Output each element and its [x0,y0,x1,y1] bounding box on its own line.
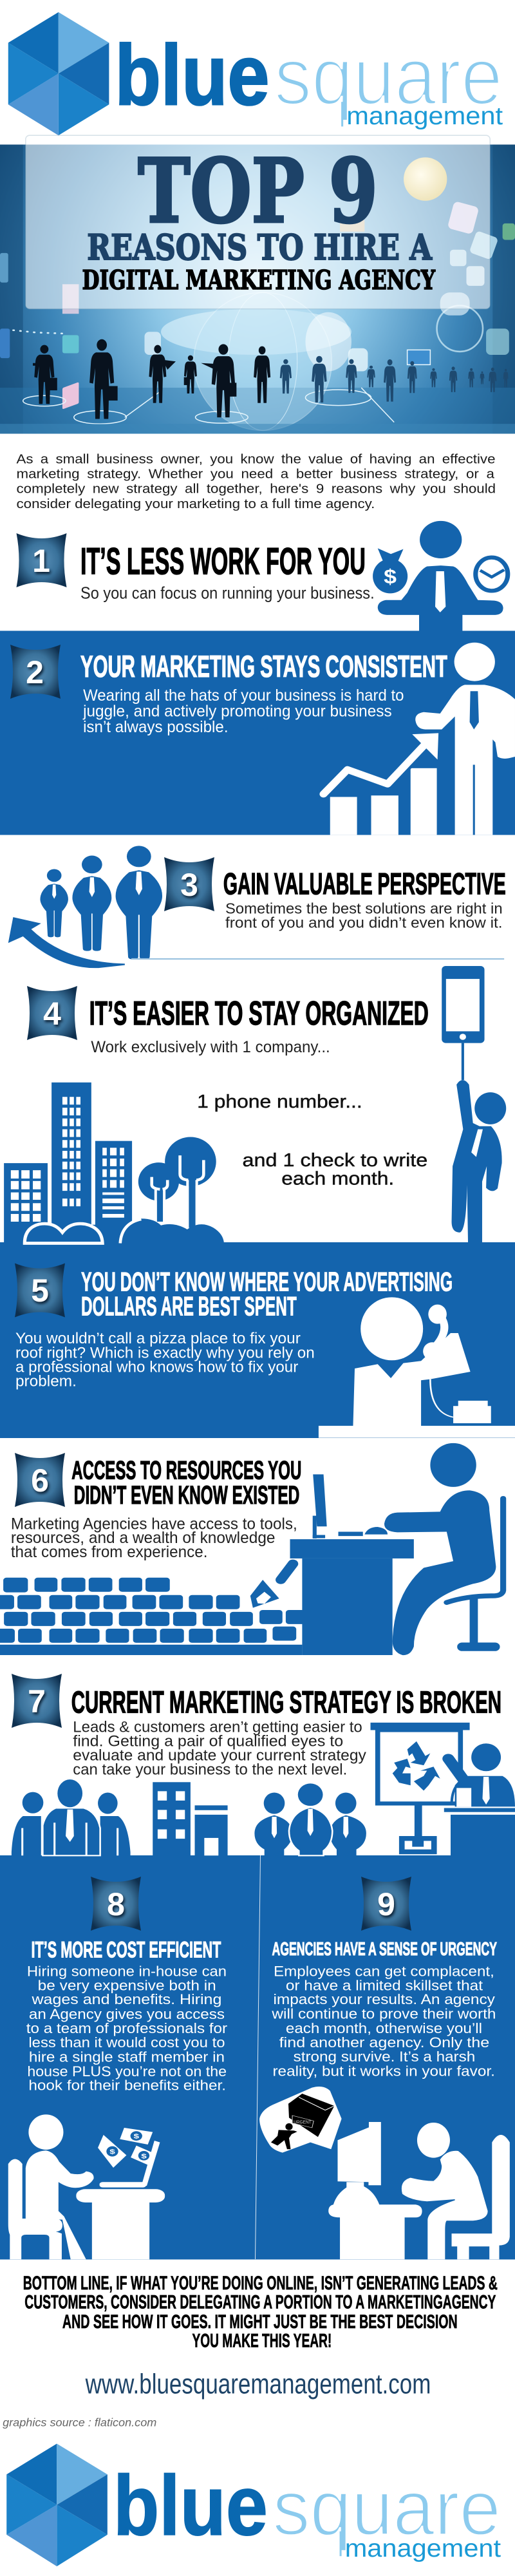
text 7: can take your business to the next level. [73,1761,347,1778]
logo: bottom [6,2443,501,2566]
text 1: So you can focus on running your business. [80,583,375,602]
badge 2: 2 [26,654,44,690]
bottom line text: YOU MAKE THIS YEAR! [192,2330,332,2351]
text 4: work exclusively: Work exclusively with 1 company... [91,1039,330,1056]
logo: bottom: blue [113,2458,268,2553]
icon: person with laptop and money [8,2114,165,2259]
heading: top 9: TOP 9 [138,140,378,243]
text 2: juggle, and actively promoting your business [82,702,392,720]
text 7 [73,1718,366,1778]
text 4: phone number: 1 phone number... [197,1092,362,1112]
text 8: be very expensive both in [38,1977,216,1993]
band: section 2 background [0,631,515,835]
text 7: find. Getting a pair of qualified eyes to [73,1732,343,1750]
icon: three growing men [40,846,162,960]
badge 1: 1 [32,543,50,579]
section 4 [4,966,506,1243]
intro text: marketing strategy. Whether you need a better business strategy, or a [17,467,494,481]
badge 8 [91,1877,141,1931]
speech bubble with urgent box: URGENT [294,2119,312,2125]
section 6 [0,1443,503,1655]
text 5 [15,1329,315,1390]
text 4: one check: each month. [281,1168,394,1189]
text 6 [11,1515,297,1560]
bottom line text [23,2273,498,2351]
icon: three people left [12,1779,131,1855]
text 8: less than it would cost you to [28,2034,225,2050]
icon: presenter at lectern [444,1743,515,1855]
badge 4 [27,986,77,1040]
icon: city [4,1083,224,1243]
badge 6 [15,1453,65,1507]
icon: money bills [98,2128,156,2168]
section 9 [272,1938,497,2079]
icon: person at desk [290,1443,503,1655]
badge 3 [164,857,214,911]
section 1 [80,521,508,630]
badge 8: 8 [107,1886,125,1922]
banner image [0,144,515,433]
logo wordmark: square [274,31,503,122]
text 2 [82,687,404,736]
text 7: Leads & customers aren’t getting easier to [73,1718,362,1736]
text 8: Hiring someone in-house can [27,1963,227,1979]
icon: person at computer with urgent bubble [259,2087,510,2259]
icon: presentation board with recycle symbol [371,1723,470,1854]
closing section [3,2273,501,2566]
icon: trowel [250,1564,293,1608]
divider between 8 and 9 [255,1855,260,2259]
text 6: resources, and a wealth of knowledge [11,1529,276,1546]
badge 1 [17,533,67,587]
graphics source: graphics source : flaticon.com [3,2416,156,2429]
icon: three people right [254,1783,366,1855]
text 7: evaluate and update your current strategy [73,1747,366,1764]
section 3 [8,846,506,968]
band: section 5 background [0,1242,515,1438]
text 8: hire a single staff member in [29,2049,225,2065]
text 5: You wouldn’t call a pizza place to fix your [15,1329,301,1347]
text 8: wages and benefits. Hiring [32,1991,221,2007]
banner silhouettes: people [33,339,509,419]
section 8 [26,1938,227,2093]
ground [0,1645,302,1655]
badge 7 [12,1674,62,1728]
section 7 [12,1685,515,1855]
arrow: curved back [8,917,125,968]
desk [319,1426,515,1438]
badge 2 [10,645,61,699]
title panel [26,135,490,309]
text 6: that comes from experience. [11,1543,207,1560]
badge 5 [15,1264,65,1318]
text 5: roof right? Which is exactly why you rely on [15,1344,315,1361]
text 9 [272,1963,496,2079]
badge 6: 6 [31,1463,49,1499]
icon: hexagon cube [8,12,109,135]
text 6: Marketing Agencies have access to tools, [11,1515,297,1533]
section 2 [80,643,515,835]
badge 9 [361,1877,411,1931]
badge 5: 5 [31,1273,49,1309]
text 2: Wearing all the hats of your business is hard to [83,687,404,705]
text: IT’S MORE COST EFFICIENT [31,1938,221,1963]
badge 7: 7 [28,1683,46,1719]
logo wordmark: blue [115,28,269,123]
text 8 [26,1963,227,2093]
text 2: isn’t always possible. [83,718,229,736]
heading 6 [71,1455,301,1510]
section 5 [15,1267,515,1438]
logo wordmark: management [346,102,503,130]
icon: phone balloon [442,966,485,1080]
brick wall [0,1578,305,1643]
icon: money bills: $ [109,2148,115,2155]
icon: person balancing money and time: $ [384,566,397,589]
text 5: a professional who knows how to fix your [15,1358,298,1376]
icon: buildings [153,1782,228,1855]
text 8: house PLUS you’re not on the [27,2063,227,2079]
intro text: As a small business owner, you know the value of having an effective [17,452,495,466]
text 3 [225,900,503,931]
text 4: one check: and 1 check to write [243,1150,427,1171]
intro text: completely new strategy all together, here's 9 reasons why you should [17,482,496,496]
text 8: to a team of professionals for [26,2020,227,2036]
text 5: problem. [15,1372,77,1390]
badge 9: 9 [377,1886,395,1922]
badge 4: 4 [43,996,61,1032]
icon: money bills: $ [141,2152,147,2160]
text 4: one check [243,1150,427,1189]
icon: person balancing money and time [373,521,508,630]
heading: reasons: REASONS TO HIRE A [87,227,432,268]
icon: man on the phone [353,1297,491,1426]
logo: top [8,12,503,135]
text 8: hook for their benefits either. [28,2078,226,2093]
icon: money bills: $ [133,2132,139,2140]
text 8: an Agency gives you access [29,2006,225,2022]
icon: man hanging from phone [452,1080,506,1243]
heading 5 [81,1267,453,1321]
icon: man with growth chart [324,643,515,835]
band: sections 8 and 9 background [0,1855,515,2259]
intro text [17,452,496,511]
speech bubble with urgent box [259,2087,342,2153]
badge 3: 3 [180,867,198,903]
logo wordmark [115,28,503,130]
intro text: consider delegating your marketing to a full time agency. [17,497,375,511]
